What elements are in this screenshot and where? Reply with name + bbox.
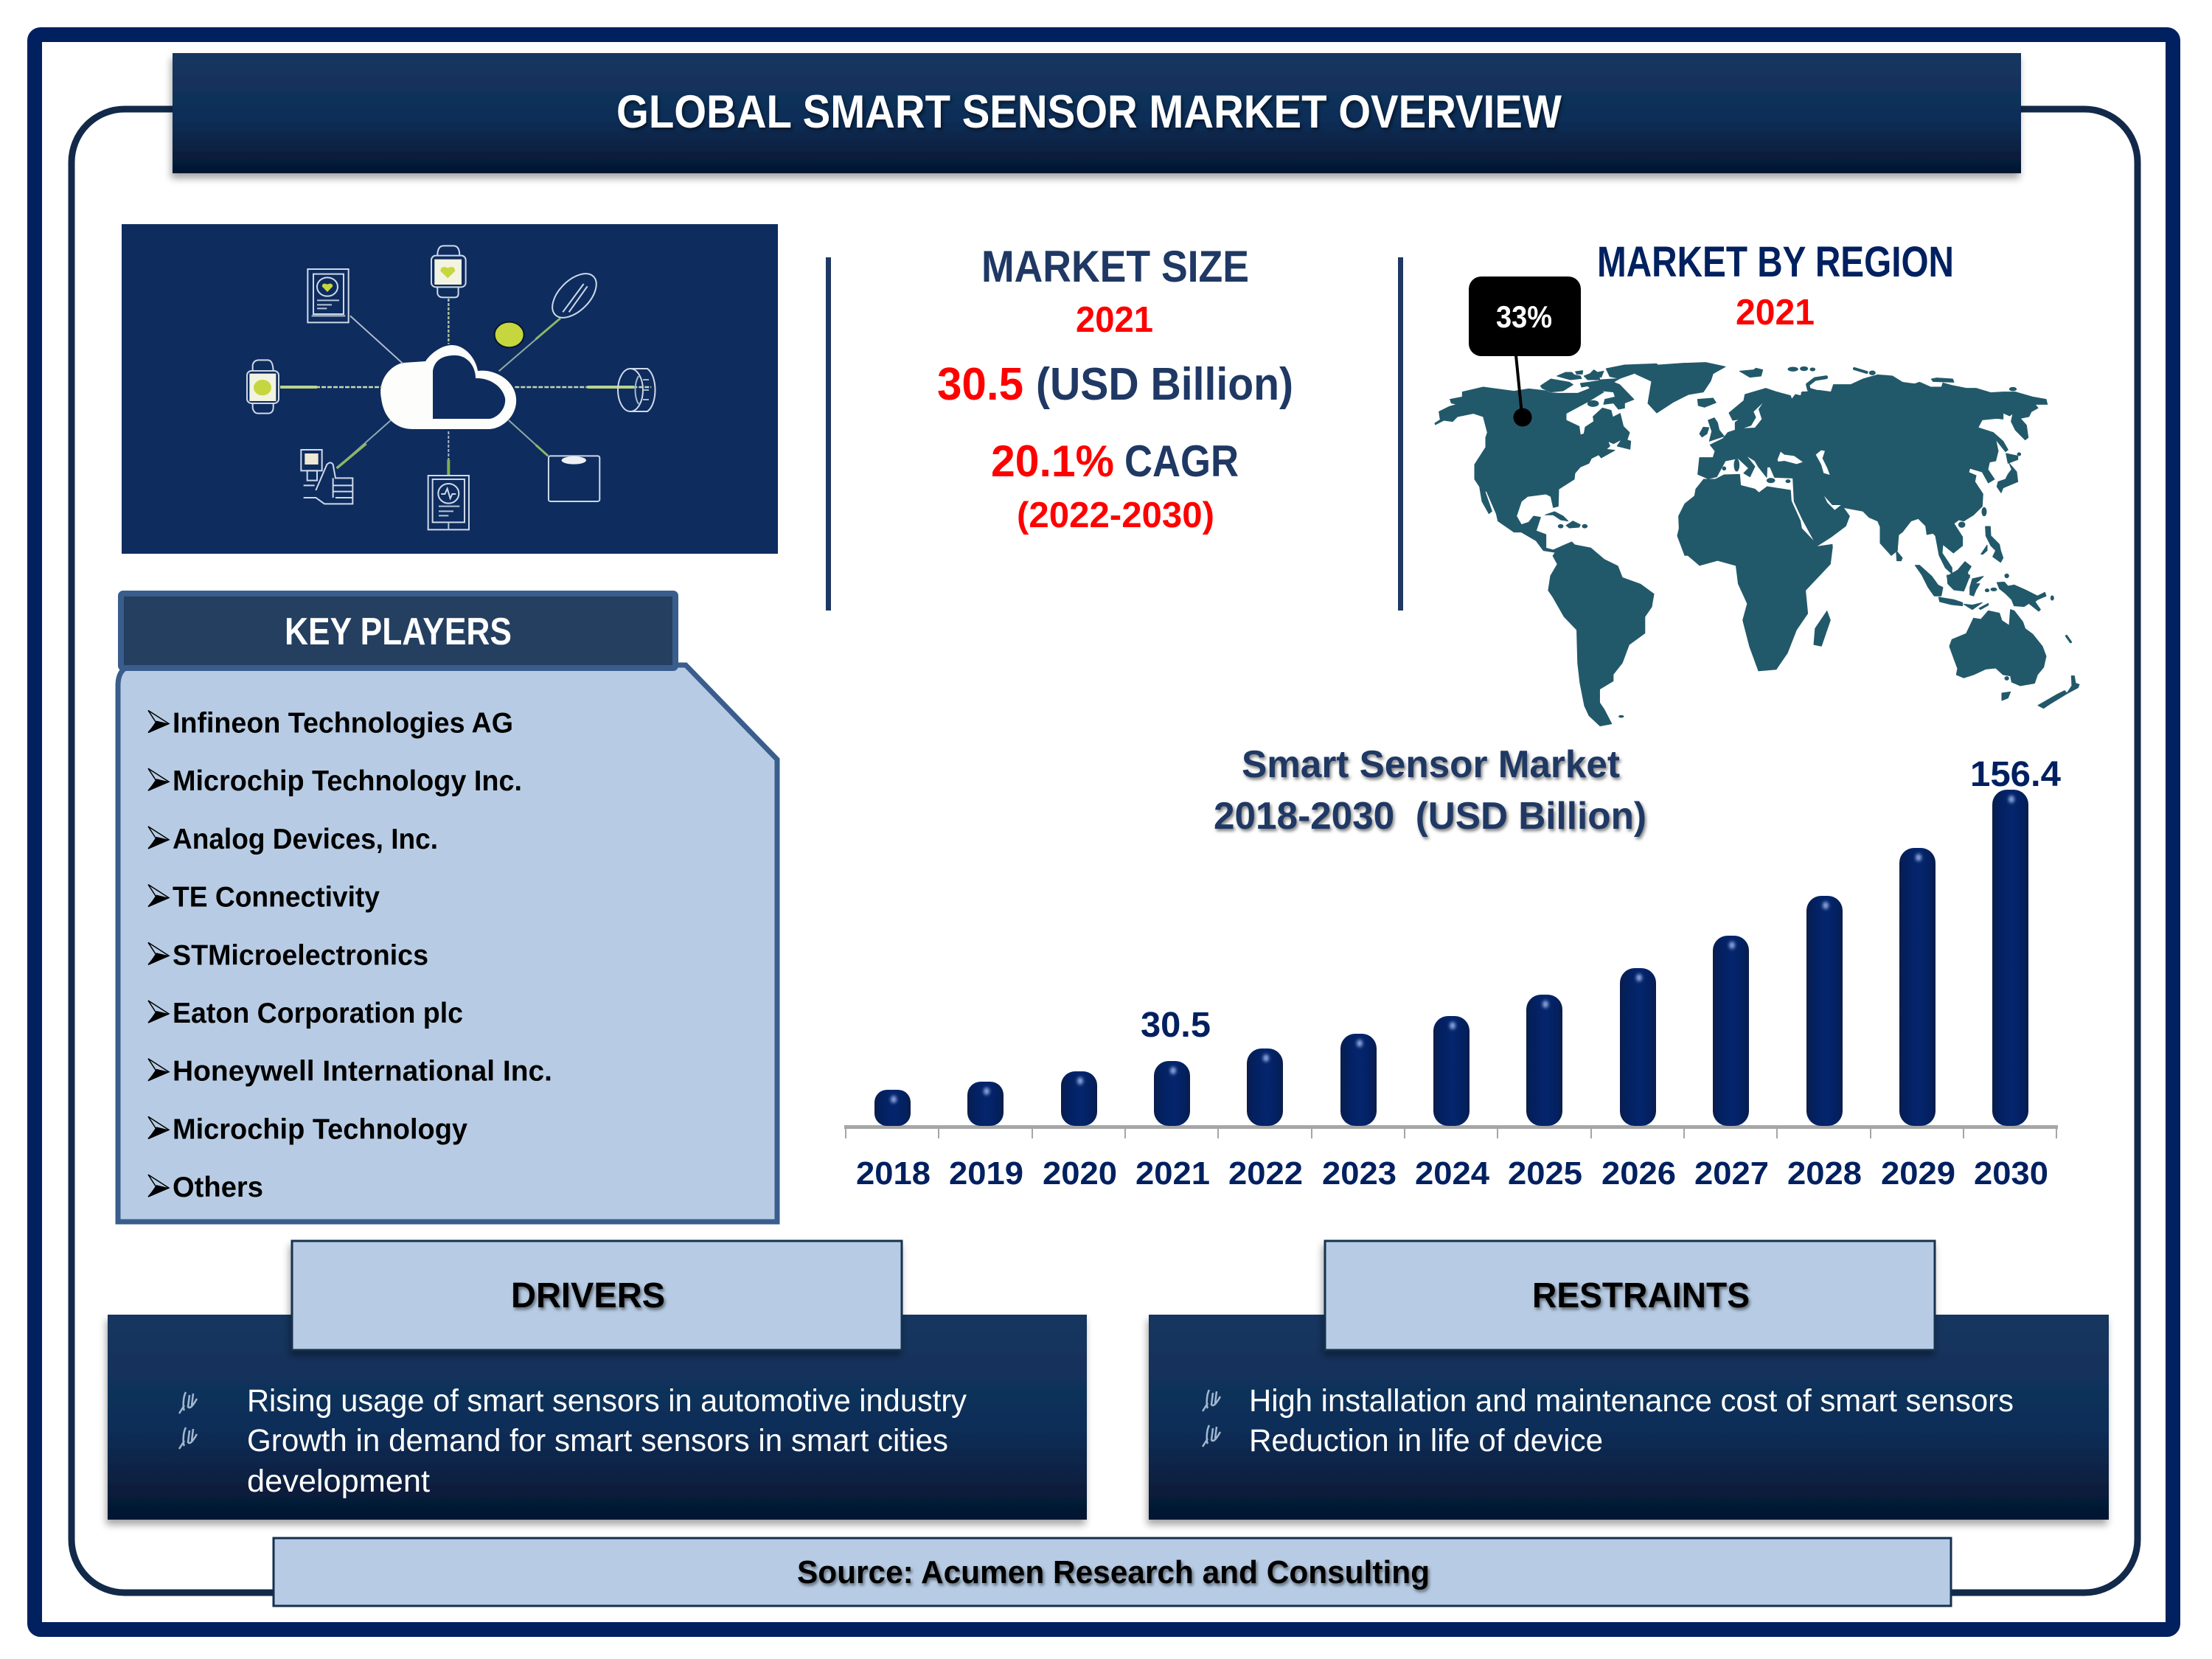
chart title: 2018-2030 (USD Billion) [1214,795,1646,838]
restraints text: High installation and maintenance cost of smart sensors [1249,1383,2014,1419]
icons in upper half [247,246,651,414]
value labels: 30.5 [1141,1006,1211,1045]
north america and arctic islands [1435,364,1658,552]
year labels [856,1155,2048,1192]
key players list: Infineon Technologies AG [173,708,513,739]
year labels: 2029 [1881,1155,1955,1192]
bars [874,790,2028,1126]
key players list: Eaton Corporation plc [173,998,463,1029]
drivers text: development [247,1464,430,1499]
market size block: (2022-2030) [1017,495,1214,535]
title banner: GLOBAL SMART SENSOR MARKET OVERVIEW [616,86,1562,138]
market size block: CAGR [1124,437,1239,486]
year labels: 2026 [1601,1155,1676,1192]
value labels [1141,755,2061,1045]
divider left of market by region [1398,257,1403,611]
restraints bullet icons [1203,1390,1220,1447]
year labels: 2021 [1135,1155,1210,1192]
market size block: MARKET SIZE [981,242,1249,291]
panel: key players [118,594,777,1222]
year labels: 2030 [1974,1155,2048,1192]
value labels: 156.4 [1970,755,2061,794]
world map [1435,363,2079,726]
key players list: Honeywell International Inc. [173,1056,552,1088]
drivers bullet icons [179,1392,197,1449]
market size block: 30.5 [937,359,1023,410]
market size block: 20.1% [991,437,1114,486]
market by region block [1435,238,2079,726]
chart title [1214,743,1646,838]
market size block: 2021 [1076,300,1153,340]
key players list [148,708,552,1203]
east asia [1880,375,2048,596]
market size block: (USD Billion) [1036,359,1293,410]
icons on the right side [618,369,655,411]
cloud with heart [380,345,516,429]
key players heading [121,594,675,668]
title banner [173,53,2021,173]
source bar: Source: Acumen Research and Consulting [797,1554,1430,1590]
key players heading: KEY PLAYERS [285,611,512,653]
divider left of market size [826,257,831,611]
key players list: STMicroelectronics [173,939,428,971]
year labels: 2024 [1415,1155,1490,1192]
restraints heading: RESTRAINTS [1532,1276,1750,1315]
key players list: Analog Devices, Inc. [173,824,438,855]
key players list: TE Connectivity [173,882,380,914]
year labels: 2025 [1508,1155,1582,1192]
restraints text [1249,1383,2014,1458]
drivers heading [292,1241,902,1350]
southeast asia and oceania [1938,574,2079,709]
key players list: Others [173,1172,263,1203]
year labels: 2020 [1043,1155,1117,1192]
chart title: Smart Sensor Market [1242,743,1620,786]
year labels: 2022 [1228,1155,1303,1192]
panel: restraints [1149,1241,2109,1520]
bar highlights [891,796,2014,1103]
callout: 33% North America: 33% [1496,299,1552,334]
drivers text: Growth in demand for smart sensors in smart cities [247,1423,948,1458]
year labels: 2028 [1787,1155,1862,1192]
key players list: Microchip Technology Inc. [173,765,522,797]
source bar [274,1538,1951,1606]
icons in lower half [301,420,599,529]
drivers text: Rising usage of smart sensors in automotive industry [247,1383,967,1419]
year labels: 2019 [949,1155,1023,1192]
europe, west asia and north africa [1635,363,1910,555]
market by region block: 2021 [1736,293,1815,333]
year labels: 2027 [1694,1155,1769,1192]
year labels: 2018 [856,1155,931,1192]
illustration: connected smart sensors around a cloud [122,224,778,554]
market by region block: MARKET BY REGION [1597,238,1954,286]
key players list box [118,665,777,1222]
year labels: 2023 [1322,1155,1397,1192]
restraints text: Reduction in life of device [1249,1423,1603,1458]
south america, lower africa, madagascar [1548,538,1833,726]
callout: 33% North America [1469,276,1581,426]
bar chart [844,743,2061,1192]
panel: drivers [108,1241,1087,1520]
drivers heading: DRIVERS [511,1276,665,1315]
market size block [937,242,1293,535]
drivers text [247,1383,967,1499]
key players list: Microchip Technology [173,1113,467,1145]
axis [844,1125,2058,1138]
restraints heading [1325,1241,1935,1350]
